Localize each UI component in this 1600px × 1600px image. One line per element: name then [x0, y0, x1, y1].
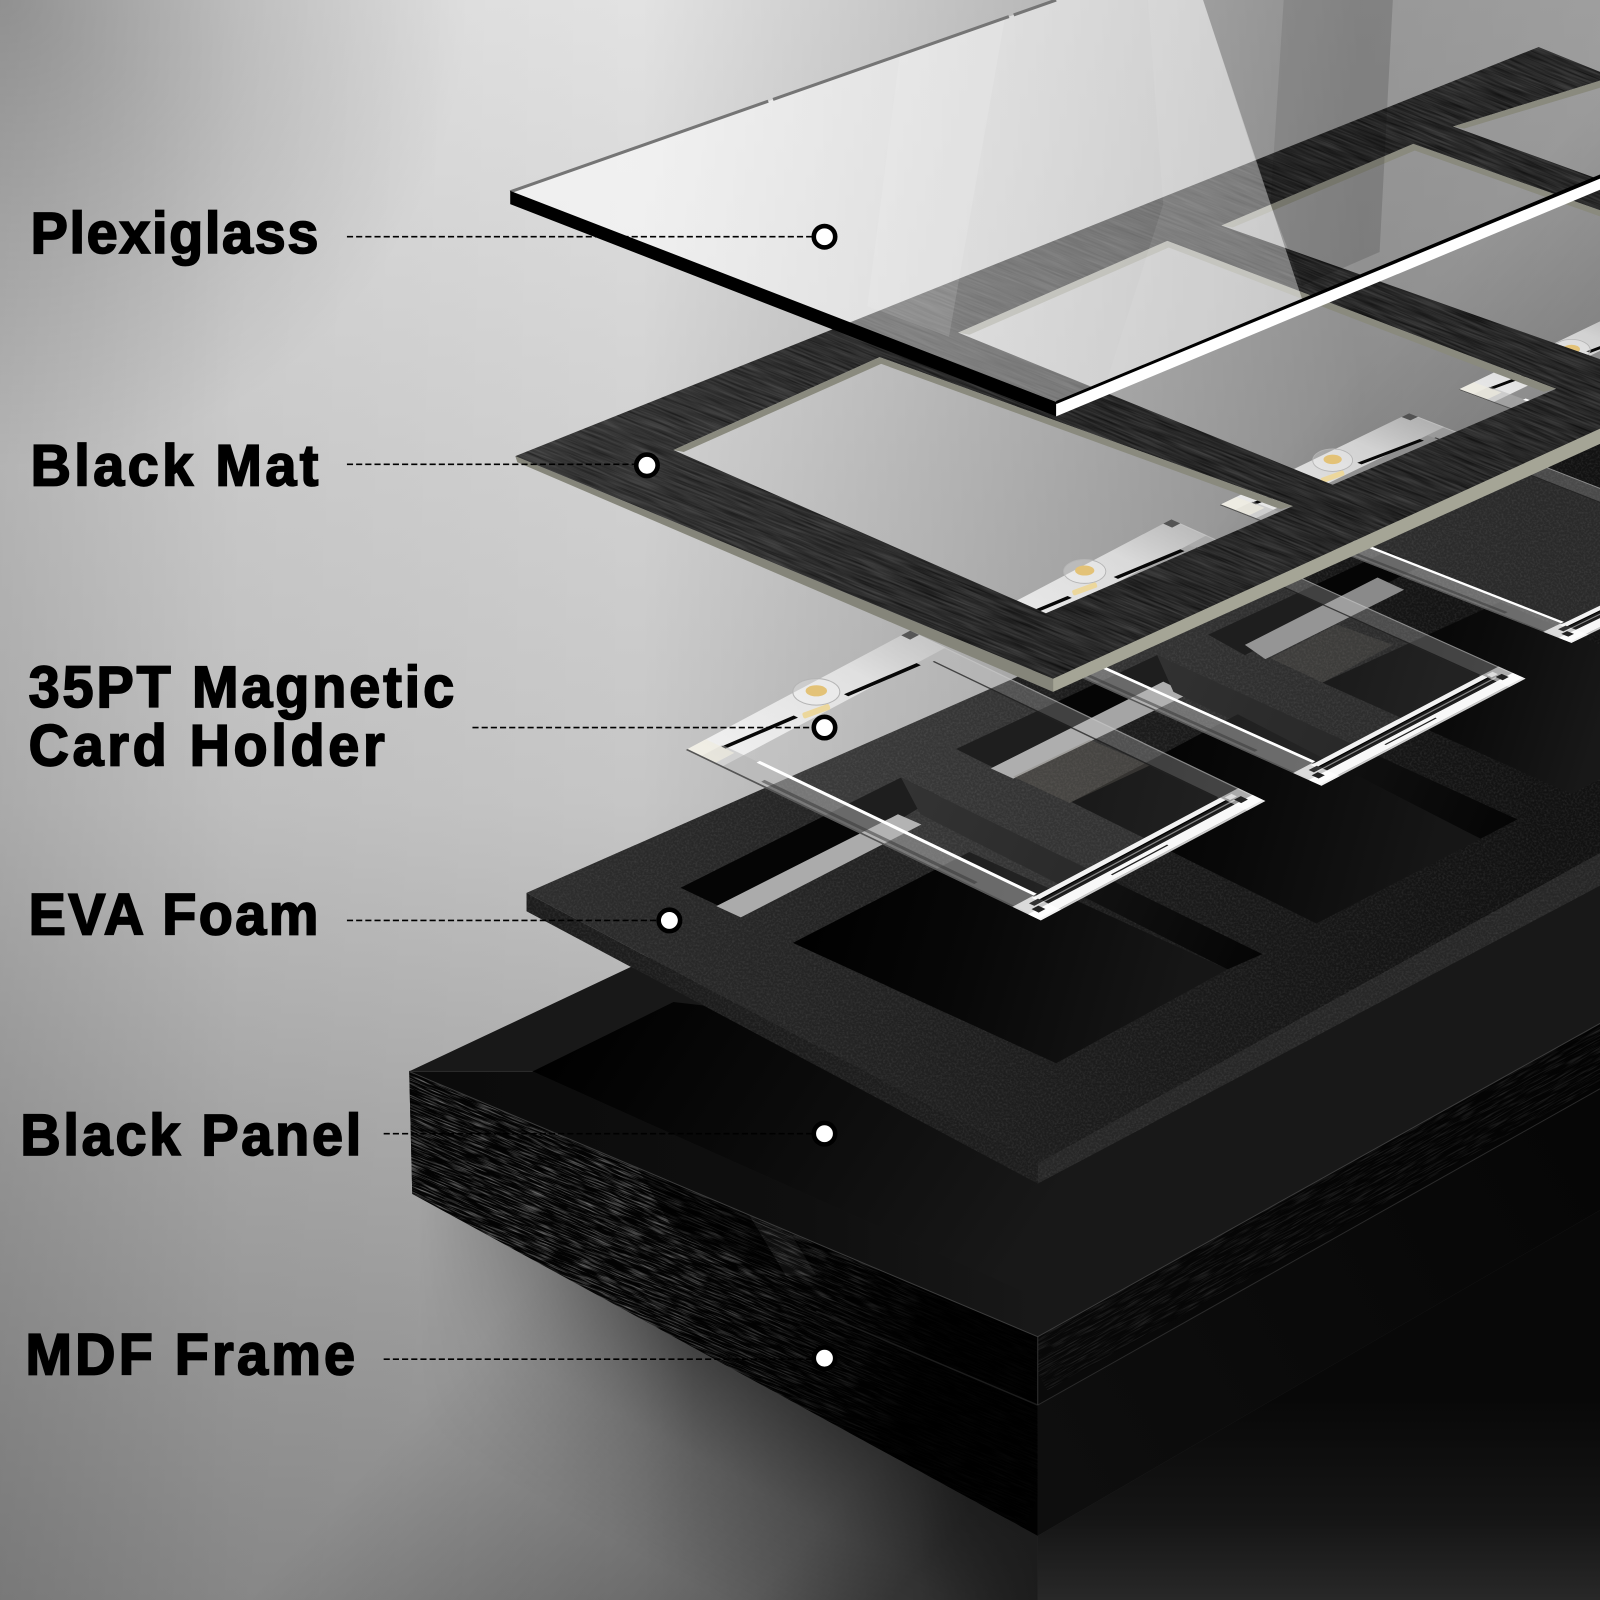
label: Black Mat: Black Mat — [31, 434, 318, 499]
Black panel top surface — [409, 510, 1600, 1337]
glass surface, bright left reflection — [510, 0, 1302, 402]
label: Plexiglass: Plexiglass — [31, 201, 318, 266]
label: Black Panel: Black Panel — [20, 1103, 361, 1168]
mat seen darker through the glass — [850, 160, 1300, 402]
glass white right edge — [1056, 178, 1600, 416]
label: Plexiglass — [31, 201, 835, 266]
frame right faces — [816, 1001, 1600, 1536]
foam openings, column 2 — [956, 655, 1517, 923]
card holder 3 — [1219, 413, 1600, 643]
Black mat with card windows — [515, 47, 1600, 692]
glass dark top line on right edge — [1056, 174, 1600, 404]
label: 35PT Magnetic Card Holder: Card Holder — [29, 713, 385, 779]
label: 35PT Magnetic Card Holder: 35PT Magnetic — [29, 655, 454, 720]
foam openings, column 1 — [681, 778, 1262, 1063]
mat surface — [516, 47, 1600, 678]
EVA foam layer — [510, 408, 1600, 1194]
label: MDF Frame: MDF Frame — [25, 1322, 355, 1388]
label: MDF Frame — [25, 1322, 835, 1388]
Plexiglass sheet — [510, 0, 1600, 416]
inner window lips — [673, 81, 1600, 509]
floor shadow under the frame — [388, 1194, 1600, 1600]
card holder 2 — [967, 519, 1526, 786]
label: Black Panel — [20, 1103, 835, 1168]
card holder 1 — [686, 631, 1265, 920]
foam top and edge faces — [510, 408, 1600, 1194]
card holder 4 (far right) — [1458, 306, 1600, 517]
glass black left edge — [510, 191, 1056, 416]
glass reflection bands — [867, 0, 1393, 380]
lit foam seen through the holders — [1013, 624, 1393, 803]
foam openings, column 3 — [1208, 551, 1600, 794]
MDF frame — [247, 959, 1600, 1586]
glass far edge — [510, 0, 1056, 192]
frame left face with wood grain — [409, 1072, 1038, 1536]
mat edge thickness — [515, 429, 1600, 692]
label: EVA Foam: EVA Foam — [29, 883, 318, 948]
label: Black Mat — [31, 434, 658, 499]
label: EVA Foam — [29, 883, 680, 948]
label: 35PT Magnetic Card Holder — [29, 655, 835, 779]
